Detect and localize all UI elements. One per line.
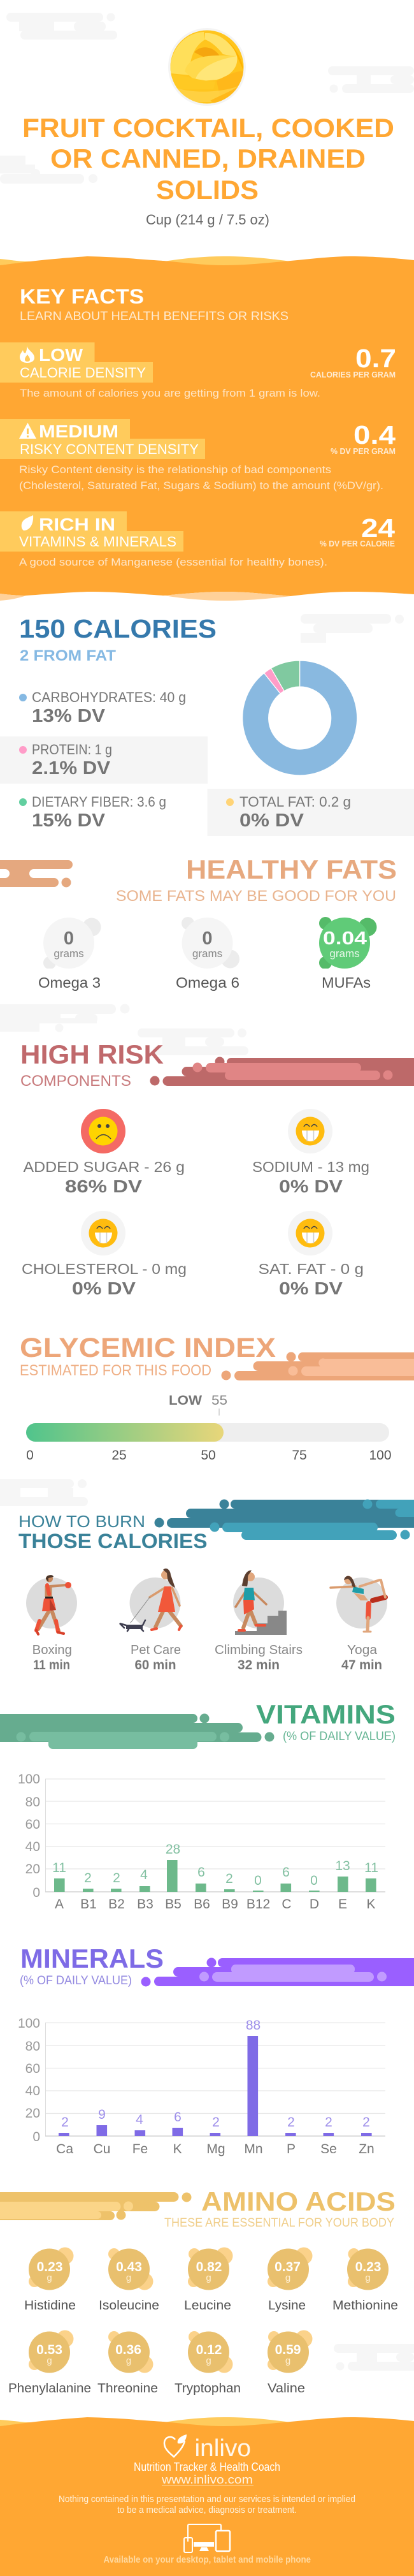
risk: added sugar: ADDED SUGAR - 26 g bbox=[23, 1159, 185, 1175]
availability note: Available on your desktop, tablet and mobile phone bbox=[103, 2554, 311, 2565]
decoration: minerals stripes bbox=[141, 1958, 414, 1987]
amino acid: phenylalanine: g bbox=[46, 2355, 52, 2366]
legend: dietary fiber bbox=[19, 794, 166, 831]
panel: healthy fats bbox=[0, 854, 397, 991]
donut chart bbox=[243, 661, 357, 775]
fat: MUFAs: 0.04 bbox=[323, 928, 367, 949]
risk: cholesterol: 0% DV bbox=[72, 1278, 136, 1298]
background cloud: amino bbox=[334, 2344, 414, 2371]
fact: medium risky content density: % DV PER GRAM bbox=[331, 446, 396, 456]
legend: protein bbox=[0, 736, 208, 784]
amino acid: threonine bbox=[97, 2331, 158, 2396]
heading: healthy fats bbox=[116, 854, 397, 905]
heading: how to burn those calories bbox=[18, 1512, 208, 1553]
fact: low calorie density: CALORIES PER GRAM bbox=[310, 370, 396, 379]
amino acid: methionine: g bbox=[365, 2272, 371, 2283]
bar chart: minerals: 2 bbox=[61, 2115, 69, 2130]
fact: low calorie density bbox=[0, 342, 396, 399]
fact: rich in vitamins and minerals: VITAMINS & MINERALS bbox=[19, 534, 176, 550]
amino acid: threonine: g bbox=[126, 2355, 131, 2366]
decoration: burn stripes bbox=[154, 1500, 414, 1540]
tagline and url: www.inlivo.com bbox=[161, 2473, 253, 2486]
icon: grin face bbox=[89, 1219, 117, 1247]
fat: omega 6: Omega 6 bbox=[176, 974, 239, 991]
tagline and url bbox=[134, 2461, 280, 2486]
bar chart: minerals: 2 bbox=[287, 2115, 295, 2130]
bar chart: minerals: 100 bbox=[18, 2016, 40, 2031]
amino acid: isoleucine: Isoleucine bbox=[99, 2299, 159, 2313]
heading: 150 calories: 150 CALORIES bbox=[19, 614, 217, 643]
activity: boxing: Boxing bbox=[32, 1643, 72, 1657]
amino acid: valine bbox=[268, 2330, 312, 2396]
serving size: Cup (214 g / 7.5 oz) bbox=[146, 212, 269, 228]
fact: rich in vitamins and minerals: A good source of Manganese (essential for healthy bones). bbox=[19, 556, 327, 568]
amino acid: lysine: g bbox=[285, 2272, 290, 2283]
activity: pet care: 60 min bbox=[135, 1658, 176, 1672]
bar chart: minerals: Se bbox=[320, 2142, 337, 2156]
amino acid: isoleucine: 0.43 bbox=[116, 2260, 142, 2274]
fat: omega 3 bbox=[38, 918, 101, 991]
title: SOLIDS bbox=[156, 175, 259, 205]
activity: pet care: Pet Care bbox=[131, 1643, 181, 1657]
legend: protein: PROTEIN: 1 g bbox=[32, 742, 112, 757]
panel: how to burn bbox=[18, 1500, 414, 1672]
panel: vitamins bbox=[0, 1699, 396, 1912]
bar chart: vitamins: 60 bbox=[25, 1817, 40, 1832]
legend: total fat: 0% DV bbox=[239, 810, 304, 831]
panel: minerals bbox=[18, 1943, 414, 2156]
bar chart: vitamins bbox=[18, 1772, 385, 1912]
heading: minerals: MINERALS bbox=[20, 1943, 164, 1973]
legend: protein: 2.1% DV bbox=[32, 758, 111, 779]
amino acid: tryptophan: Tryptophan bbox=[175, 2382, 241, 2396]
bar chart: vitamins: A bbox=[55, 1897, 64, 1912]
fact: medium risky content density: Risky Content density is the relationship of bad components bbox=[19, 464, 331, 476]
glycemic gauge: 75 bbox=[292, 1448, 307, 1463]
fact: medium risky content density: MEDIUM bbox=[39, 421, 118, 441]
panel: amino acids bbox=[0, 2186, 414, 2396]
legend: total fat: TOTAL FAT: 0.2 g bbox=[239, 794, 351, 810]
icon: yoga pose bbox=[331, 1576, 385, 1632]
bar chart: vitamins: 80 bbox=[25, 1795, 40, 1810]
bar chart: vitamins: 11 bbox=[52, 1861, 66, 1875]
fact: medium risky content density: (Cholesterol, Saturated Fat, Sugars & Sodium) to the amount (%DV/gr). bbox=[19, 479, 383, 492]
bar chart: vitamins: 6 bbox=[282, 1865, 290, 1880]
bar chart: vitamins: E bbox=[338, 1897, 347, 1912]
heading: high risk bbox=[20, 1039, 164, 1090]
bar chart: vitamins: 0 bbox=[310, 1873, 318, 1888]
bar chart: vitamins: 100 bbox=[18, 1772, 40, 1787]
bar chart: minerals: Mg bbox=[206, 2142, 225, 2156]
glycemic gauge: 100 bbox=[369, 1448, 392, 1463]
food photo: fruit cocktail bbox=[168, 28, 246, 106]
fact: low calorie density: LOW bbox=[39, 345, 83, 365]
fat: omega 3: Omega 3 bbox=[38, 974, 101, 991]
heading: 150 calories bbox=[19, 614, 217, 664]
decoration: high risk stripes bbox=[150, 1057, 414, 1086]
risk: sodium: 0% DV bbox=[279, 1176, 343, 1196]
amino acid: lysine bbox=[268, 2247, 312, 2313]
decoration: glycemic stripes bbox=[222, 1352, 414, 1380]
legend: carbohydrates: CARBOHYDRATES: 40 g bbox=[32, 689, 186, 705]
bar chart: minerals: 2 bbox=[212, 2115, 220, 2130]
risk: sodium bbox=[252, 1109, 369, 1196]
footer wave bbox=[0, 2417, 414, 2576]
activity: boxing: 11 min bbox=[33, 1658, 70, 1672]
bar chart: vitamins: B5 bbox=[165, 1897, 182, 1912]
activity: climbing stairs: 32 min bbox=[238, 1658, 280, 1672]
fact: rich in vitamins and minerals bbox=[0, 511, 395, 568]
risk: saturated fat: SAT. FAT - 0 g bbox=[259, 1261, 364, 1277]
bar chart: minerals: 40 bbox=[25, 2084, 40, 2098]
title: FRUIT COCKTAIL, COOKED bbox=[22, 113, 394, 143]
amino acid: lysine: 0.37 bbox=[275, 2260, 301, 2274]
risk: cholesterol bbox=[22, 1211, 187, 1298]
amino acid: threonine: 0.36 bbox=[115, 2343, 141, 2357]
bar chart: vitamins: K bbox=[366, 1897, 376, 1912]
amino acid: methionine: Methionine bbox=[332, 2299, 398, 2313]
orange wave band bbox=[0, 256, 414, 601]
bar chart: minerals: Zn bbox=[359, 2142, 375, 2156]
fact: rich in vitamins and minerals: 24 bbox=[361, 513, 395, 543]
background cloud: burn bbox=[0, 1479, 88, 1506]
icon: leaf bbox=[22, 515, 33, 531]
amino acid: tryptophan bbox=[175, 2331, 241, 2396]
fat: MUFAs bbox=[319, 917, 377, 991]
amino acid: valine: 0.59 bbox=[275, 2343, 301, 2357]
bar chart: vitamins: 6 bbox=[197, 1865, 205, 1880]
amino acid: valine: g bbox=[285, 2355, 290, 2366]
heading: minerals: (% OF DAILY VALUE) bbox=[20, 1974, 132, 1987]
bar chart: vitamins: B3 bbox=[137, 1897, 153, 1912]
decoration: amino stripes bbox=[0, 2192, 191, 2220]
fact: medium risky content density: RISKY CONTENT DENSITY bbox=[20, 441, 199, 457]
bar chart: minerals: Fe bbox=[132, 2142, 148, 2156]
decoration: healthy fats stripes bbox=[0, 860, 73, 888]
bar chart: vitamins: B2 bbox=[108, 1897, 125, 1912]
bar chart: minerals: 60 bbox=[25, 2061, 40, 2076]
bar chart: minerals: 4 bbox=[136, 2112, 143, 2127]
logo: inlivo: inlivo bbox=[195, 2435, 251, 2462]
icon: woman climbing stairs bbox=[235, 1570, 287, 1635]
amino acid: threonine: Threonine bbox=[97, 2382, 158, 2396]
amino acid: isoleucine: g bbox=[126, 2272, 131, 2283]
heading: key facts: KEY FACTS bbox=[20, 285, 144, 308]
amino acid: lysine: Lysine bbox=[268, 2299, 306, 2313]
bar chart: vitamins: C bbox=[282, 1897, 292, 1912]
icon: flame bbox=[20, 346, 34, 363]
icon: boxer figure bbox=[36, 1575, 71, 1634]
heading: vitamins bbox=[256, 1699, 396, 1743]
bar chart: vitamins: 28 bbox=[166, 1842, 180, 1857]
amino acid: phenylalanine bbox=[8, 2330, 91, 2396]
icon: warning triangle bbox=[19, 423, 36, 439]
fat: MUFAs: MUFAs bbox=[322, 974, 371, 991]
bar chart: vitamins: B12 bbox=[246, 1897, 270, 1912]
heading: key facts: LEARN ABOUT HEALTH BENEFITS OR RISKS bbox=[20, 310, 289, 323]
bar chart: minerals: 20 bbox=[25, 2106, 40, 2121]
activity: yoga: 47 min bbox=[341, 1658, 382, 1672]
heading: key facts bbox=[20, 285, 289, 323]
icon: woman walking dog bbox=[120, 1569, 181, 1631]
background clouds: high risk bbox=[0, 1004, 248, 1055]
fat: omega 6: grams bbox=[192, 948, 222, 960]
bar chart: minerals: Mn bbox=[244, 2142, 263, 2156]
fact: low calorie density: 0.7 bbox=[355, 344, 396, 373]
bar chart: minerals: 2 bbox=[325, 2115, 332, 2130]
bar chart: minerals: 2 bbox=[362, 2115, 370, 2130]
bar chart: minerals: P bbox=[287, 2142, 296, 2156]
fact: low calorie density: The amount of calories you are getting from 1 gram is low. bbox=[20, 387, 320, 399]
fat: omega 6: 0 bbox=[202, 928, 213, 949]
amino acid: valine: Valine bbox=[268, 2382, 305, 2396]
amino acid: histidine: Histidine bbox=[24, 2299, 76, 2313]
fat: MUFAs: grams bbox=[329, 948, 360, 960]
icon: grin face bbox=[296, 1117, 325, 1145]
panel: calories bbox=[0, 614, 414, 836]
bar chart: vitamins: B6 bbox=[194, 1897, 210, 1912]
panel: high risk bbox=[20, 1039, 414, 1298]
bar chart: vitamins: D bbox=[310, 1897, 319, 1912]
glycemic gauge: 25 bbox=[111, 1448, 127, 1463]
heading: 150 calories: 2 FROM FAT bbox=[20, 647, 116, 664]
logo: inlivo bbox=[164, 2434, 251, 2462]
heading: glycemic index bbox=[20, 1333, 276, 1379]
title bbox=[22, 113, 394, 205]
tagline and url: Nutrition Tracker & Health Coach bbox=[134, 2461, 280, 2473]
legend: total fat bbox=[208, 789, 414, 836]
bar chart: vitamins: 2 bbox=[84, 1871, 92, 1885]
amino acid: isoleucine bbox=[99, 2248, 159, 2313]
panel: footer bbox=[0, 2417, 414, 2576]
icon: devices bbox=[184, 2524, 230, 2552]
bar chart: vitamins: 13 bbox=[335, 1859, 350, 1873]
decoration: vitamins stripes bbox=[0, 1714, 274, 1749]
bar chart: vitamins: 2 bbox=[113, 1871, 120, 1885]
bar chart: vitamins: 2 bbox=[225, 1871, 233, 1886]
amino acid: phenylalanine: Phenylalanine bbox=[8, 2382, 91, 2396]
bar chart: vitamins: 20 bbox=[25, 1862, 40, 1877]
bar chart: minerals: 0 bbox=[32, 2130, 40, 2144]
activity: pet care bbox=[120, 1569, 181, 1672]
bar chart: minerals: 80 bbox=[25, 2039, 40, 2054]
icon: sad face bbox=[89, 1117, 117, 1145]
disclaimer bbox=[59, 2494, 355, 2515]
bar chart: minerals: Cu bbox=[94, 2142, 110, 2156]
risk: saturated fat bbox=[259, 1211, 364, 1298]
risk: added sugar bbox=[23, 1109, 185, 1196]
heading: vitamins: VITAMINS bbox=[256, 1699, 396, 1729]
heading: minerals bbox=[20, 1943, 164, 1987]
legend: dietary fiber: DIETARY FIBER: 3.6 g bbox=[32, 794, 166, 810]
amino acid: leucine: Leucine bbox=[184, 2299, 231, 2313]
icon: grin face bbox=[296, 1219, 325, 1247]
bar chart: minerals: 6 bbox=[174, 2110, 182, 2125]
heading: high risk: HIGH RISK bbox=[20, 1039, 164, 1069]
amino acid: methionine: 0.23 bbox=[355, 2260, 381, 2274]
glycemic gauge: 55 bbox=[211, 1393, 227, 1408]
heading: healthy fats: SOME FATS MAY BE GOOD FOR YOU bbox=[116, 888, 396, 905]
fat: omega 3: grams bbox=[54, 948, 84, 960]
heading: amino acids: AMINO ACIDS bbox=[201, 2186, 396, 2216]
heading: glycemic index: GLYCEMIC INDEX bbox=[20, 1333, 276, 1363]
amino acid: leucine bbox=[184, 2247, 233, 2313]
risk: added sugar: 86% DV bbox=[65, 1176, 142, 1196]
title: OR CANNED, DRAINED bbox=[50, 143, 366, 173]
bar chart: minerals bbox=[18, 2016, 385, 2156]
amino acid: methionine bbox=[332, 2248, 398, 2313]
disclaimer: Nothing contained in this presentation and our services is intended or implied bbox=[59, 2494, 355, 2505]
fact: rich in vitamins and minerals: % DV PER CALORIE bbox=[320, 539, 395, 548]
disclaimer: to be a medical advice, diagnosis or treatment. bbox=[117, 2505, 297, 2515]
heading: how to burn those calories: THOSE CALORIES bbox=[18, 1530, 208, 1553]
risk: sodium: SODIUM - 13 mg bbox=[252, 1159, 369, 1175]
glycemic gauge bbox=[26, 1393, 392, 1463]
activity: climbing stairs bbox=[215, 1570, 303, 1672]
bar chart: vitamins: 0 bbox=[32, 1885, 40, 1900]
activity: boxing bbox=[26, 1575, 77, 1672]
amino acid: histidine: 0.23 bbox=[37, 2260, 62, 2274]
activity: climbing stairs: Climbing Stairs bbox=[215, 1643, 303, 1657]
bar chart: vitamins: 0 bbox=[254, 1873, 262, 1888]
fact: medium risky content density bbox=[0, 419, 396, 492]
amino acid: histidine bbox=[24, 2247, 76, 2313]
panel: key facts bbox=[0, 256, 414, 601]
risk: saturated fat: 0% DV bbox=[279, 1278, 343, 1298]
bar chart: minerals: K bbox=[173, 2142, 182, 2156]
amino acid: leucine: 0.82 bbox=[196, 2260, 222, 2274]
bar chart: vitamins: 40 bbox=[25, 1840, 40, 1854]
fact: rich in vitamins and minerals: RICH IN bbox=[39, 515, 115, 534]
heading: glycemic index: ESTIMATED FOR THIS FOOD bbox=[20, 1362, 211, 1379]
heading: high risk: COMPONENTS bbox=[20, 1072, 131, 1090]
fact: medium risky content density: 0.4 bbox=[353, 420, 396, 450]
heading: how to burn those calories: HOW TO BURN bbox=[18, 1512, 145, 1531]
bar chart: vitamins: B9 bbox=[222, 1897, 238, 1912]
glycemic gauge: 50 bbox=[201, 1448, 216, 1463]
bar chart: vitamins: 11 bbox=[364, 1861, 378, 1875]
amino acid: tryptophan: 0.12 bbox=[196, 2343, 222, 2357]
bar chart: vitamins: 4 bbox=[140, 1868, 148, 1882]
bar chart: minerals: 88 bbox=[246, 2018, 261, 2033]
legend: carbohydrates: 13% DV bbox=[32, 706, 106, 726]
amino acid: histidine: g bbox=[46, 2272, 52, 2283]
background cloud bbox=[301, 614, 404, 643]
background clouds: header bbox=[0, 13, 414, 184]
heading: healthy fats: HEALTHY FATS bbox=[186, 854, 397, 884]
bar chart: minerals: Ca bbox=[56, 2142, 73, 2156]
heading: amino acids: THESE ARE ESSENTIAL FOR YOUR BODY bbox=[164, 2216, 394, 2230]
amino acid: leucine: g bbox=[206, 2272, 211, 2283]
heading: amino acids bbox=[164, 2186, 396, 2230]
heading: vitamins: (% OF DAILY VALUE) bbox=[283, 1730, 396, 1743]
fat: omega 6 bbox=[176, 917, 239, 991]
legend: carbohydrates bbox=[19, 689, 186, 726]
bar chart: vitamins: B1 bbox=[80, 1897, 97, 1912]
activity: yoga: Yoga bbox=[347, 1643, 378, 1657]
legend: dietary fiber: 15% DV bbox=[32, 810, 106, 831]
fact: low calorie density: CALORIE DENSITY bbox=[20, 365, 146, 381]
bar chart: minerals: 9 bbox=[98, 2107, 106, 2122]
panel: glycemic index bbox=[20, 1333, 414, 1463]
risk: cholesterol: CHOLESTEROL - 0 mg bbox=[22, 1261, 187, 1277]
glycemic gauge: LOW bbox=[169, 1393, 202, 1408]
fat: omega 3: 0 bbox=[64, 928, 74, 949]
activity: yoga bbox=[331, 1576, 387, 1672]
glycemic gauge: 0 bbox=[26, 1448, 34, 1463]
amino acid: tryptophan: g bbox=[206, 2355, 211, 2366]
icon: heart with leaf bbox=[164, 2434, 187, 2457]
amino acid: phenylalanine: 0.53 bbox=[36, 2343, 62, 2357]
